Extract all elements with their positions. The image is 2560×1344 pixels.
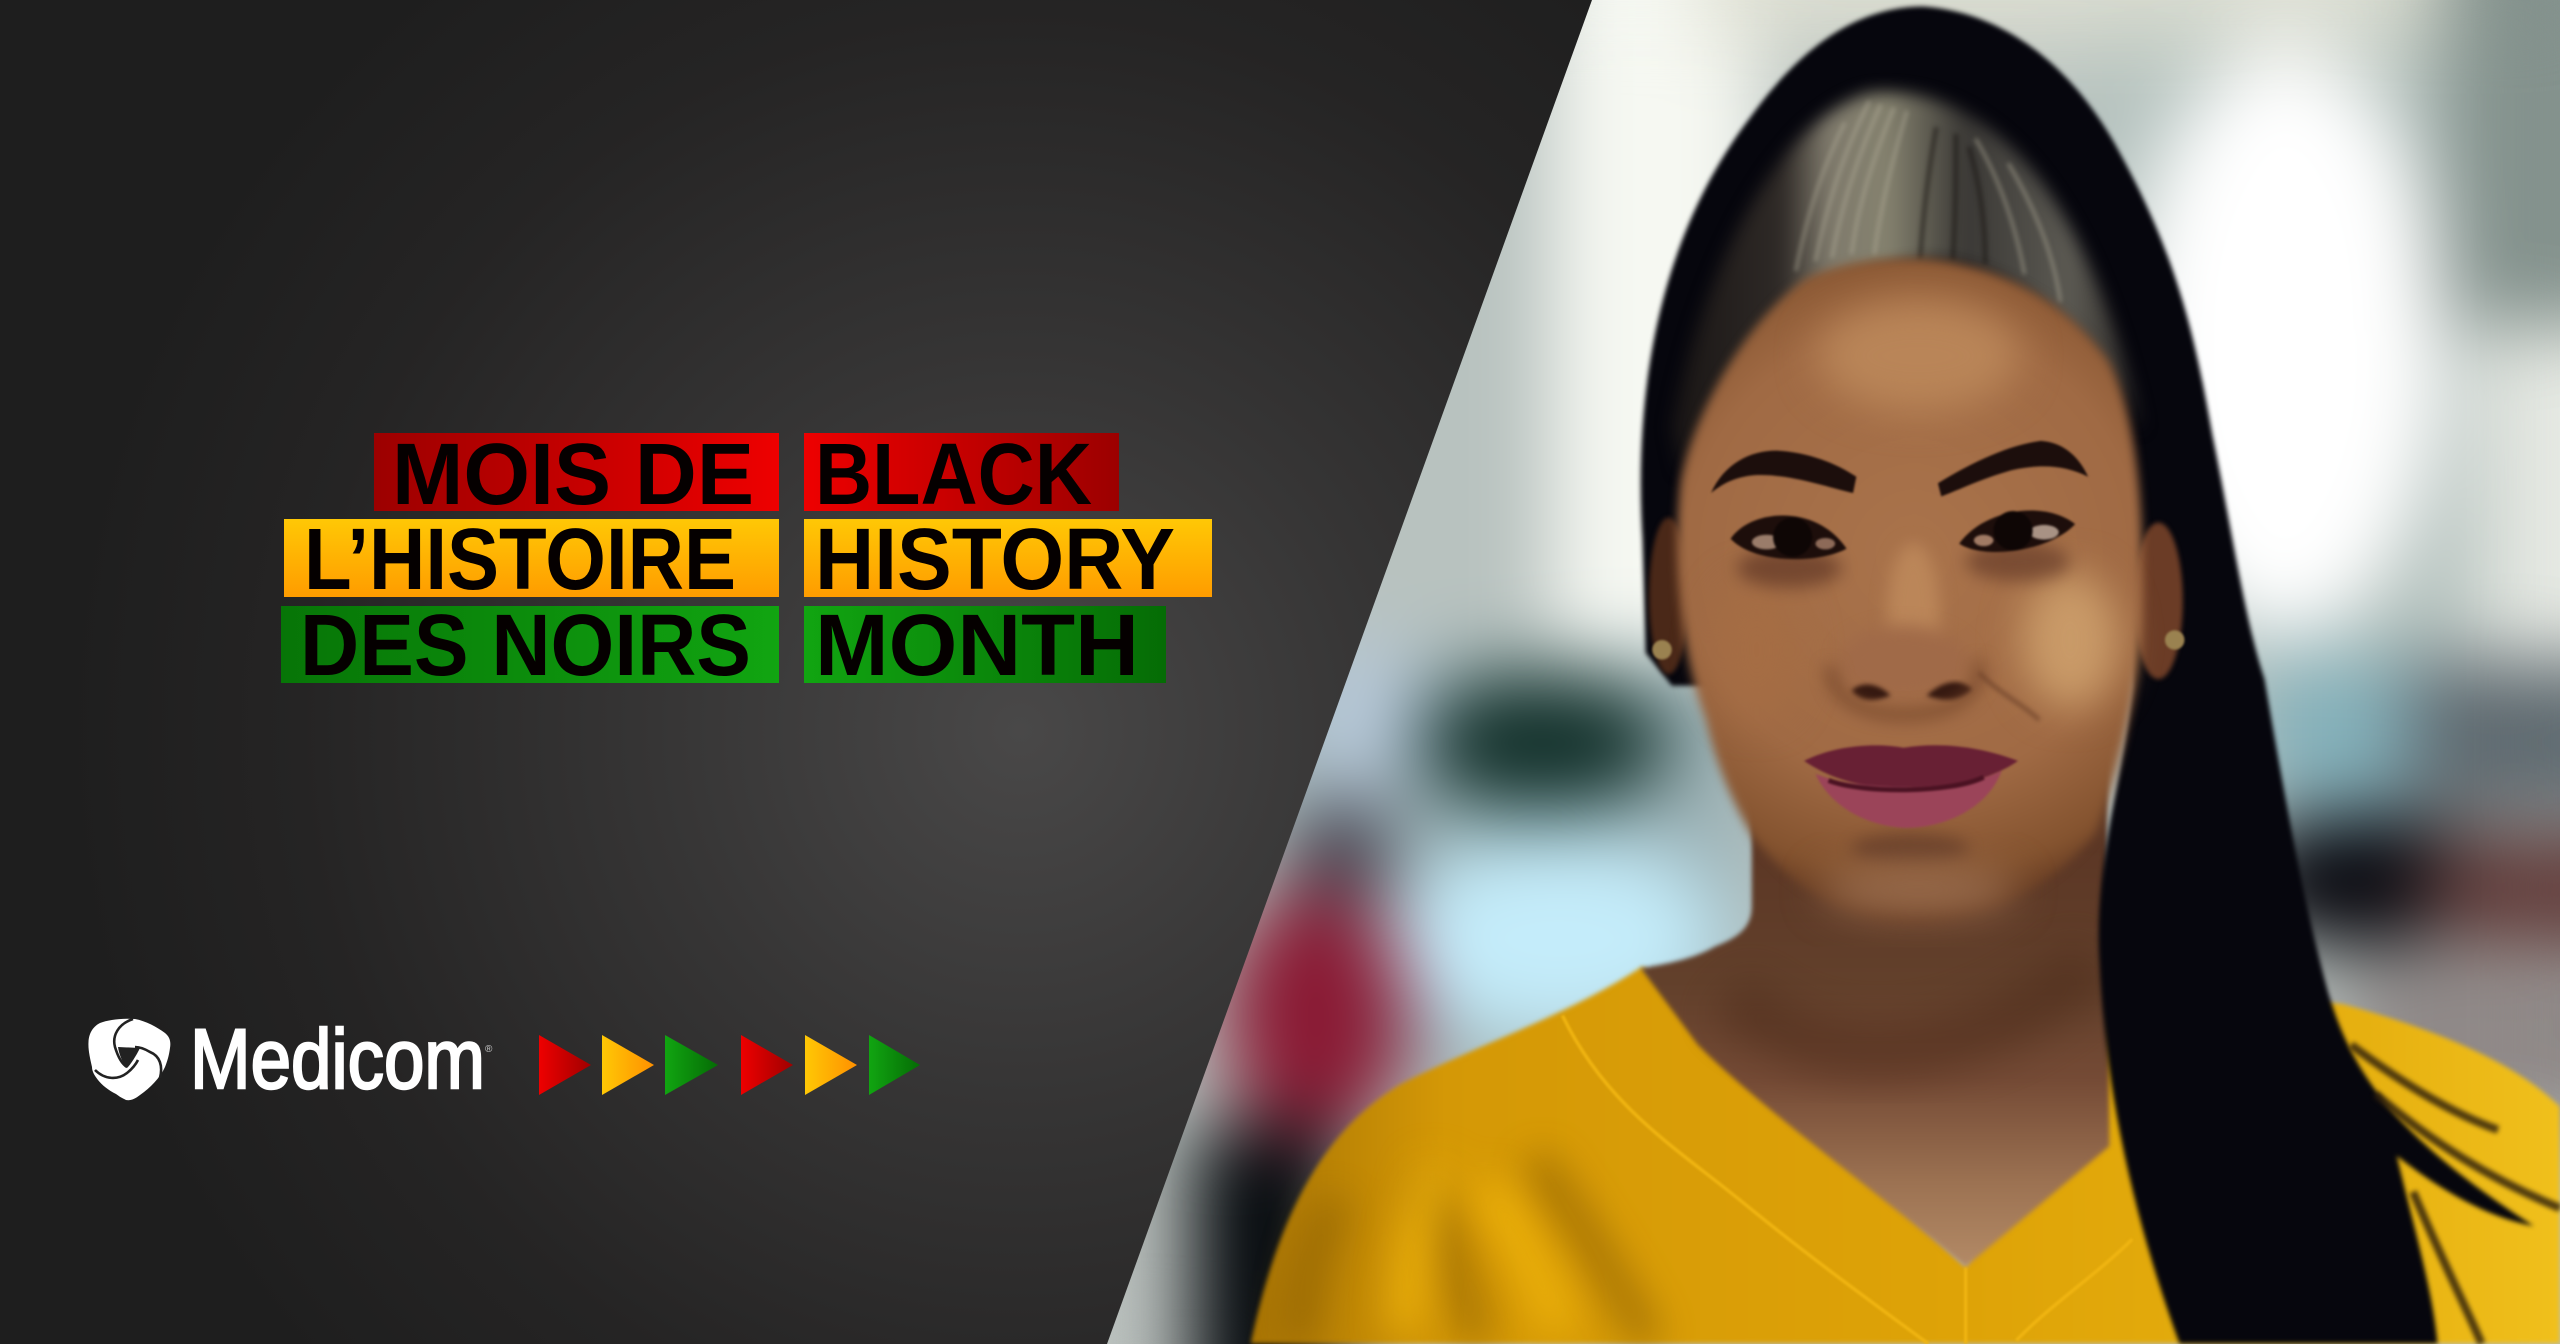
slicked hair with grey sheen bbox=[1672, 92, 2142, 473]
arrow red 1 bbox=[539, 1035, 591, 1095]
nose bbox=[1831, 625, 1979, 715]
face shading and highlights bbox=[1714, 300, 2119, 916]
face bbox=[1677, 258, 2143, 924]
arrow red 2 bbox=[741, 1035, 793, 1095]
banner: MONTH: MONTH bbox=[815, 597, 1139, 694]
yellow sweater bbox=[1251, 967, 2560, 1344]
arrow green 2 bbox=[869, 1035, 920, 1095]
right ear bbox=[2134, 522, 2183, 679]
banner: MOIS DE: MOIS DE bbox=[392, 426, 754, 523]
arrows: six coloured triangles bbox=[539, 1035, 920, 1095]
flyaway hair strands bbox=[2351, 1045, 2560, 1344]
earrings bbox=[1652, 630, 2184, 660]
neck and chest bbox=[1639, 782, 2112, 1268]
logo: Medicom bbox=[88, 1012, 493, 1106]
left eye bbox=[1731, 515, 1847, 559]
eyebrows bbox=[1711, 441, 2088, 496]
blurred office background bbox=[1078, 0, 2560, 1344]
banner: BLACK: BLACK bbox=[815, 426, 1092, 523]
arrow amber 1 bbox=[602, 1035, 654, 1095]
arrow green 1 bbox=[665, 1035, 718, 1095]
arrow amber 2 bbox=[805, 1035, 857, 1095]
left ear bbox=[1649, 518, 1688, 674]
banner: HISTORY: HISTORY bbox=[815, 511, 1175, 608]
lips bbox=[1804, 745, 2018, 828]
registered mark: ® bbox=[485, 1044, 493, 1055]
right eye bbox=[1959, 510, 2075, 552]
wordmark: Medicom bbox=[190, 1012, 485, 1106]
title block: bilingual coloured banners bbox=[281, 426, 1212, 694]
panel: photo of a smiling woman in a yellow sweater bbox=[1078, 0, 2560, 1344]
icon: Medicom shield swirl bbox=[88, 1019, 170, 1100]
banner: DES NOIRS: DES NOIRS bbox=[300, 597, 751, 694]
banner: L'HISTOIRE: L’HISTOIRE bbox=[304, 511, 736, 608]
long black hair bbox=[1641, 7, 2534, 1344]
